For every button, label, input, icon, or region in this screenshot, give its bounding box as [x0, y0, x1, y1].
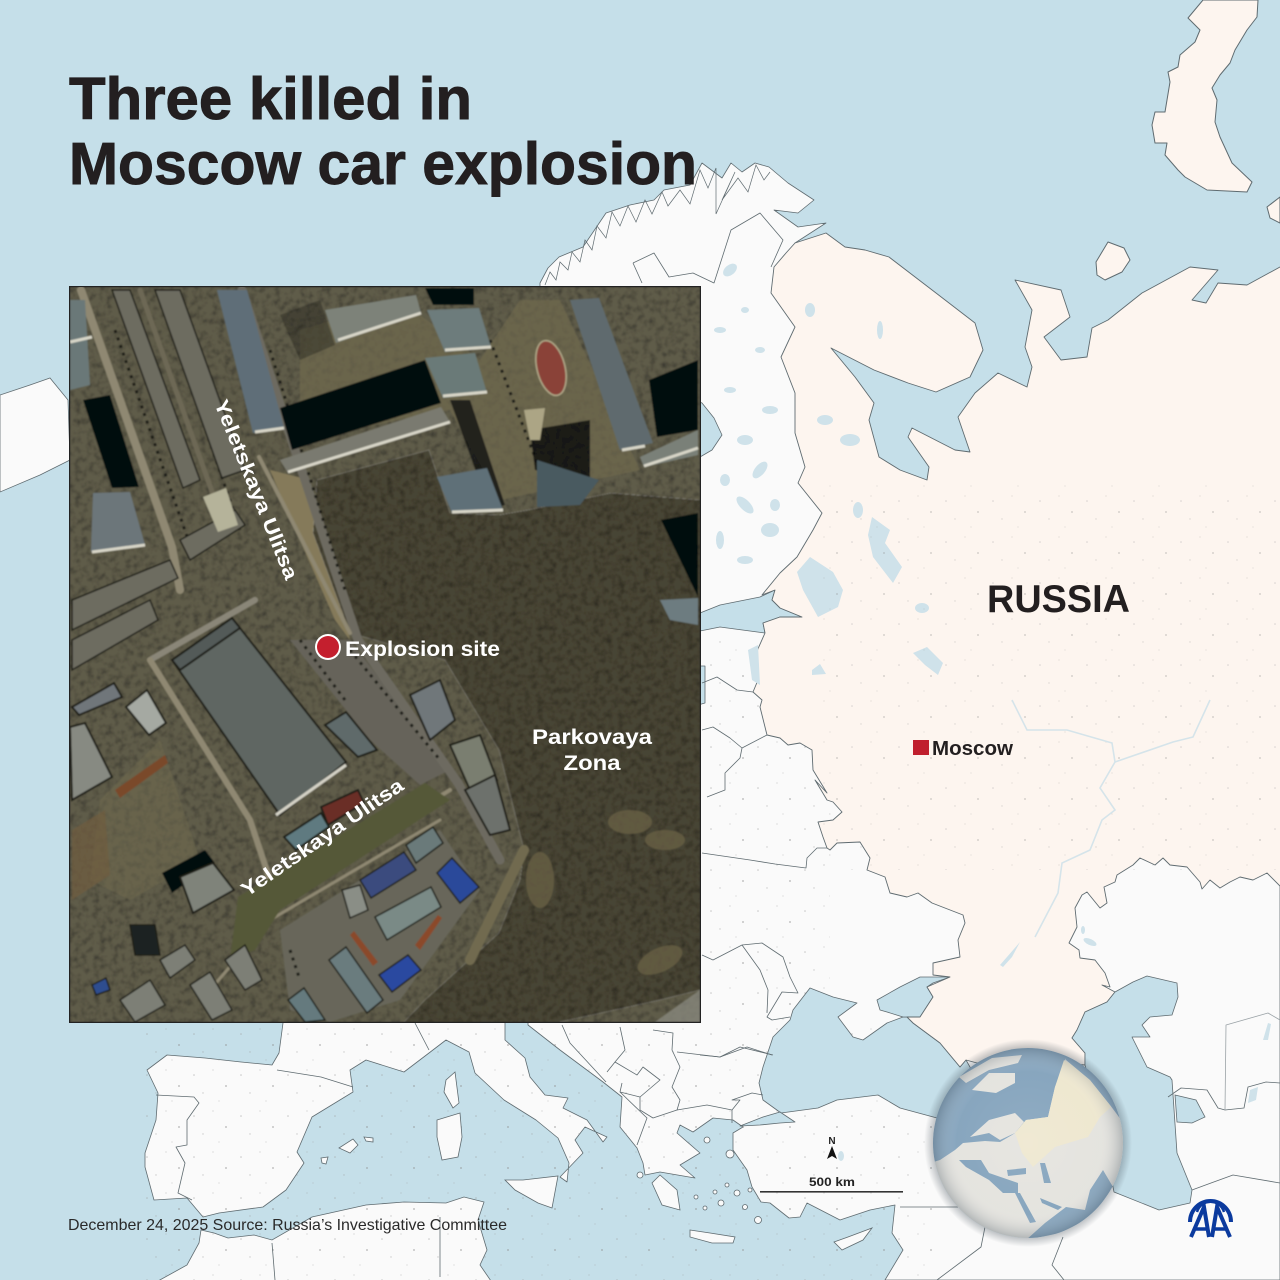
- footer: date and source: December 24, 2025 Source: Russia’s Investigative Committee: [68, 1217, 507, 1234]
- yards and tan ground: [90, 300, 640, 1022]
- parked cars along roads: [115, 330, 540, 980]
- forest clearings: [526, 810, 700, 1022]
- lakes: Finland and Karelia: [714, 261, 883, 564]
- label: Yeletskaya Ulitsa diagonal: Yeletskaya Ulitsa: [237, 774, 409, 901]
- logo: AA: [1190, 1201, 1231, 1237]
- lagoon: Kara-Bogaz: [1175, 1095, 1205, 1123]
- roof highlights: [70, 313, 698, 552]
- warehouse complex: [70, 618, 510, 913]
- sea: Gulf of Finland and Gulf of Riga: [695, 400, 802, 705]
- roads: [81, 290, 524, 990]
- label: explosion site marker: [315, 634, 500, 661]
- land: Africa: [158, 1197, 491, 1280]
- sand court: [524, 408, 545, 440]
- islands: Aegean: [637, 1137, 762, 1224]
- settlements in Russia: [820, 480, 1280, 870]
- north arrow: N: [828, 1136, 836, 1147]
- coast: Norwegian fjords: [545, 165, 770, 285]
- seas: Black Sea, Azov, Marmara: [740, 977, 1000, 1126]
- label: Russia: RUSSIA: [987, 578, 1130, 621]
- globe ocean: [933, 1048, 1113, 1238]
- lower warehouses with blue roofs: [288, 827, 479, 1022]
- green verge: [230, 783, 450, 960]
- rivers: Volga and Kama: [1012, 700, 1210, 937]
- globe land: Eurasia and Africa: [930, 1058, 1130, 1245]
- apartment blocks: [70, 290, 698, 625]
- globe locator: [924, 1039, 1132, 1247]
- label: Parkovaya Zona: [532, 726, 652, 775]
- marker: Moscow: Moscow: [932, 738, 1013, 760]
- globe seas: [959, 1050, 1130, 1240]
- low sheds lower left: [92, 925, 262, 1022]
- globe shading: [933, 1048, 1123, 1238]
- running track: [534, 339, 568, 397]
- sea: Caspian: [1072, 976, 1192, 1210]
- land: Europe and western Asia: [145, 163, 1280, 1280]
- rows of low buildings, upper left: [72, 290, 245, 670]
- satellite base: [70, 287, 700, 1022]
- title: [69, 66, 697, 197]
- label: Yeletskaya Ulitsa vertical: Yeletskaya Ulitsa: [209, 397, 302, 584]
- globe land: Scandinavia: [970, 1113, 1024, 1140]
- lakes and rivers: [714, 261, 1271, 1161]
- arched hall: [203, 488, 238, 532]
- title: Three killed in: [69, 66, 472, 132]
- label: Parkovaya Zona: Zona: [564, 752, 621, 775]
- panel: satellite inset: [69, 286, 701, 1023]
- scale bar: 500 km: [809, 1177, 855, 1189]
- islands: Novaya Zemlya, Kolguyev, Vaygach: [1096, 0, 1280, 280]
- label: explosion site marker: Explosion site: [345, 638, 500, 661]
- islands: [0, 378, 872, 1250]
- country borders: [156, 213, 1280, 1280]
- land: speckled settlements: [140, 640, 940, 1280]
- globe land: Greenland and Arctic islands: [959, 1055, 1022, 1093]
- title: Moscow car explosion: [69, 131, 697, 197]
- globe Russia: [1015, 1060, 1111, 1167]
- land: Russia: [753, 233, 1280, 1067]
- shadows of tall blocks: [83, 288, 698, 893]
- label: Parkovaya Zona: Parkovaya: [532, 726, 652, 749]
- forest: [313, 450, 700, 1022]
- north arrow: [827, 1136, 837, 1159]
